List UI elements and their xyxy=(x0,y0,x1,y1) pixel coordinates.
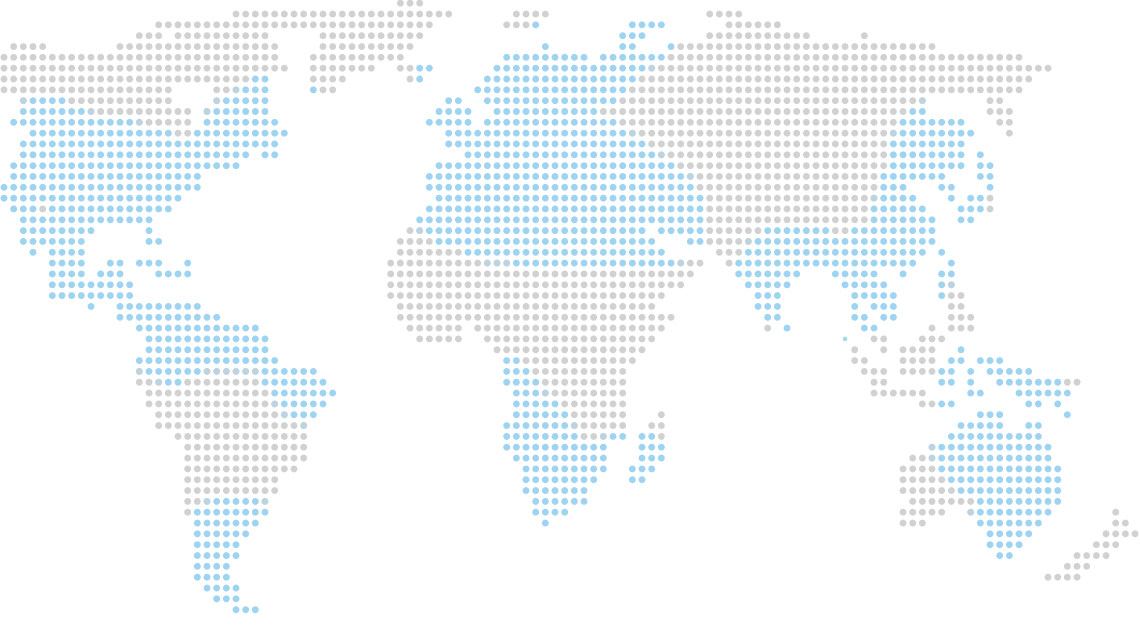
blue dots: Europe, Africa, Middle East, India and East Asia xyxy=(420,25,990,523)
region: North America and Greenland xyxy=(4,3,449,317)
region: South America xyxy=(139,328,333,610)
blue dots: USA, Canada, Mexico and Central America xyxy=(4,68,429,317)
region: Europe, Africa and Asia xyxy=(391,14,1048,523)
blue dots: northern South America and the southern cone xyxy=(139,328,333,610)
grey dots: central South America xyxy=(139,371,304,512)
grey dots: northern Canada and Greenland xyxy=(4,3,449,209)
grey dots: Russia, central Asia, North Africa and Middle East xyxy=(391,14,1048,436)
clipped blue dot near Borneo xyxy=(843,337,847,341)
region: Southeast Asia and the Pacific islands xyxy=(845,339,1077,415)
blended dots on region borders, between grey and blue xyxy=(23,68,971,512)
region: Australia and New Zealand xyxy=(903,426,1135,577)
grey dots: Philippines, Malaysia and Indonesia xyxy=(855,339,1077,404)
blue dots: eastern Indonesia and Papua xyxy=(942,350,1067,415)
grey dots: Western Australia and New Zealand xyxy=(903,447,1135,577)
blue dots: eastern and central Australia xyxy=(942,426,1058,556)
